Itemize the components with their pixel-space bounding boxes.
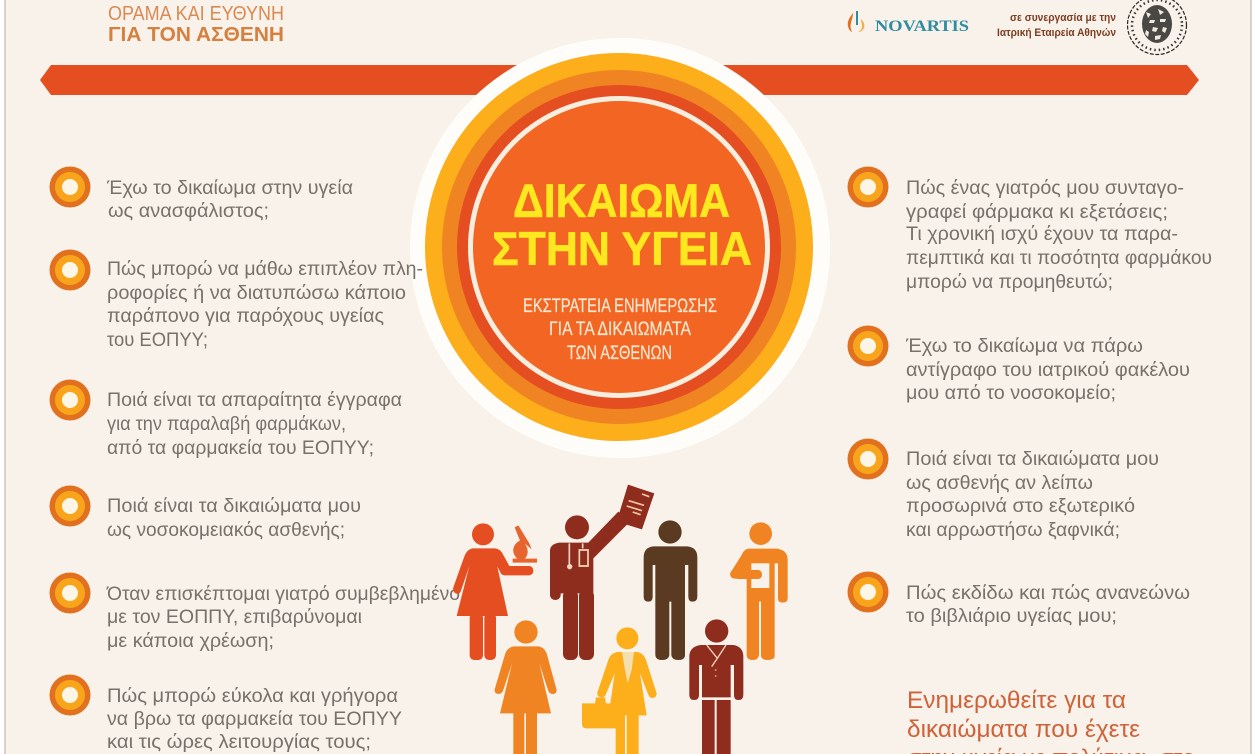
question 8: [848, 326, 1190, 404]
question 4: [50, 486, 361, 541]
partner credit: σε συνεργασία με την: [1010, 12, 1116, 24]
question 3: για την παραλαβή φαρμάκων,: [107, 414, 346, 435]
question 7: [848, 166, 1212, 293]
question 9: Ποιά είναι τα δικαιώματα μου: [906, 449, 1159, 470]
question 7: μπορώ να προμηθευτώ;: [906, 272, 1113, 293]
badge title: ΔΙΚΑΙΩΜΑ: [513, 174, 730, 227]
question 7: γραφεί φάρμακα κι εξετάσεις;: [906, 202, 1168, 223]
logo: Novartis: [848, 11, 969, 35]
call to action: Ενημερωθείτε για τα: [907, 687, 1126, 714]
call to action: δικαιώματα που έχετε: [907, 716, 1140, 743]
question 1: ως ανασφάλιστος;: [108, 201, 269, 222]
question 4: Ποιά είναι τα δικαιώματα μου: [107, 496, 361, 517]
question 2: ροφορίες ή να διατυπώσω κάποιο: [107, 283, 406, 304]
badge subtitle: [523, 296, 717, 364]
question 2: παράπονο για παρόχους υγείας: [107, 306, 384, 327]
icon: Athens Medical Society seal: [1128, 0, 1186, 54]
figure: doctor holding document: [550, 485, 654, 660]
brand tagline: [108, 3, 284, 46]
question 10: [848, 572, 1190, 627]
badge title: ΣΤΗΝ ΥΓΕΙΑ: [492, 222, 752, 275]
question 10: το βιβλιάριο υγείας μου;: [906, 606, 1117, 627]
question 4: ως νοσοκομειακός ασθενής;: [107, 520, 345, 541]
figure: businesswoman with briefcase: [582, 627, 657, 754]
question 9: και αρρωστήσω ξαφνικά;: [906, 520, 1120, 541]
badge subtitle: ΤΩΝ ΑΣΘΕΝΩΝ: [567, 343, 672, 364]
brand tagline: ΓΙΑ ΤΟΝ ΑΣΘΕΝΗ: [108, 24, 284, 46]
figure: woman in orange: [495, 620, 557, 754]
question 2: του ΕΟΠΥΥ;: [107, 330, 208, 351]
question 9: προσωρινά στο εξωτερικό: [906, 496, 1135, 517]
question 3: από τα φαρμακεία του ΕΟΠΥΥ;: [107, 438, 374, 459]
question 8: Έχω το δικαίωμα να πάρω: [905, 336, 1143, 357]
question 6: [50, 674, 402, 753]
left question list: [50, 166, 460, 753]
figure: woman with microscope: [453, 523, 537, 660]
question 9: [848, 438, 1159, 541]
question 2: Πώς μπορώ να μάθω επιπλέον πλη-: [107, 259, 423, 280]
question 7: Πώς ένας γιατρός μου συνταγο-: [906, 178, 1184, 199]
question 8: μου από το νοσοκομείο;: [906, 383, 1116, 404]
people illustration: [453, 485, 788, 754]
badge subtitle: ΕΚΣΤΡΑΤΕΙΑ ΕΝΗΜΕΡΩΣΗΣ: [523, 296, 717, 317]
badge title: [492, 174, 752, 275]
right question list: [848, 166, 1212, 627]
question 9: ως ασθενής αν λείπω: [906, 473, 1093, 494]
question 5: με κάποια χρέωση;: [107, 631, 274, 652]
partner credit: Ιατρική Εταιρεία Αθηνών: [997, 27, 1116, 39]
question 2: [50, 250, 423, 351]
question 6: Πώς μπορώ εύκολα και γρήγορα: [107, 686, 398, 707]
partner credit: [997, 12, 1116, 39]
central badge: [410, 38, 830, 458]
question 8: αντίγραφο του ιατρικού φακέλου: [906, 360, 1190, 381]
brand tagline: ΟΡΑΜΑ ΚΑΙ ΕΥΘΥΝΗ: [108, 3, 284, 25]
question 6: να βρω τα φαρμακεία του ΕΟΠΥΥ: [107, 709, 402, 730]
call to action: [907, 687, 1195, 754]
question 7: πεμπτικά και τι ποσότητα φαρμάκου: [906, 248, 1212, 269]
figure: man in suit: [689, 619, 743, 754]
badge subtitle: ΓΙΑ ΤΑ ΔΙΚΑΙΩΜΑΤΑ: [549, 319, 691, 340]
figure: man in brown: [644, 520, 697, 660]
question 5: [50, 572, 460, 652]
ribbon bar: [40, 65, 1199, 95]
question 3: [50, 380, 402, 459]
question 3: Ποιά είναι τα απαραίτητα έγγραφα: [107, 390, 402, 411]
question 5: με τον ΕΟΠΠΥ, επιβαρύνομαι: [107, 607, 362, 628]
question 7: Τι χρονική ισχύ έχουν τα παρα-: [906, 224, 1178, 245]
question 1: [50, 166, 353, 222]
question 1: Έχω το δικαίωμα στην υγεία: [106, 178, 353, 199]
question 6: και τις ώρες λειτουργίας τους;: [107, 732, 371, 753]
figure: person with clipboard: [730, 522, 788, 660]
question 10: Πώς εκδίδω και πώς ανανεώνω: [906, 583, 1190, 604]
logo: Novartis: NOVARTIS: [875, 18, 969, 35]
question 5: Όταν επισκέπτομαι γιατρό συμβεβλημένο: [106, 584, 460, 605]
